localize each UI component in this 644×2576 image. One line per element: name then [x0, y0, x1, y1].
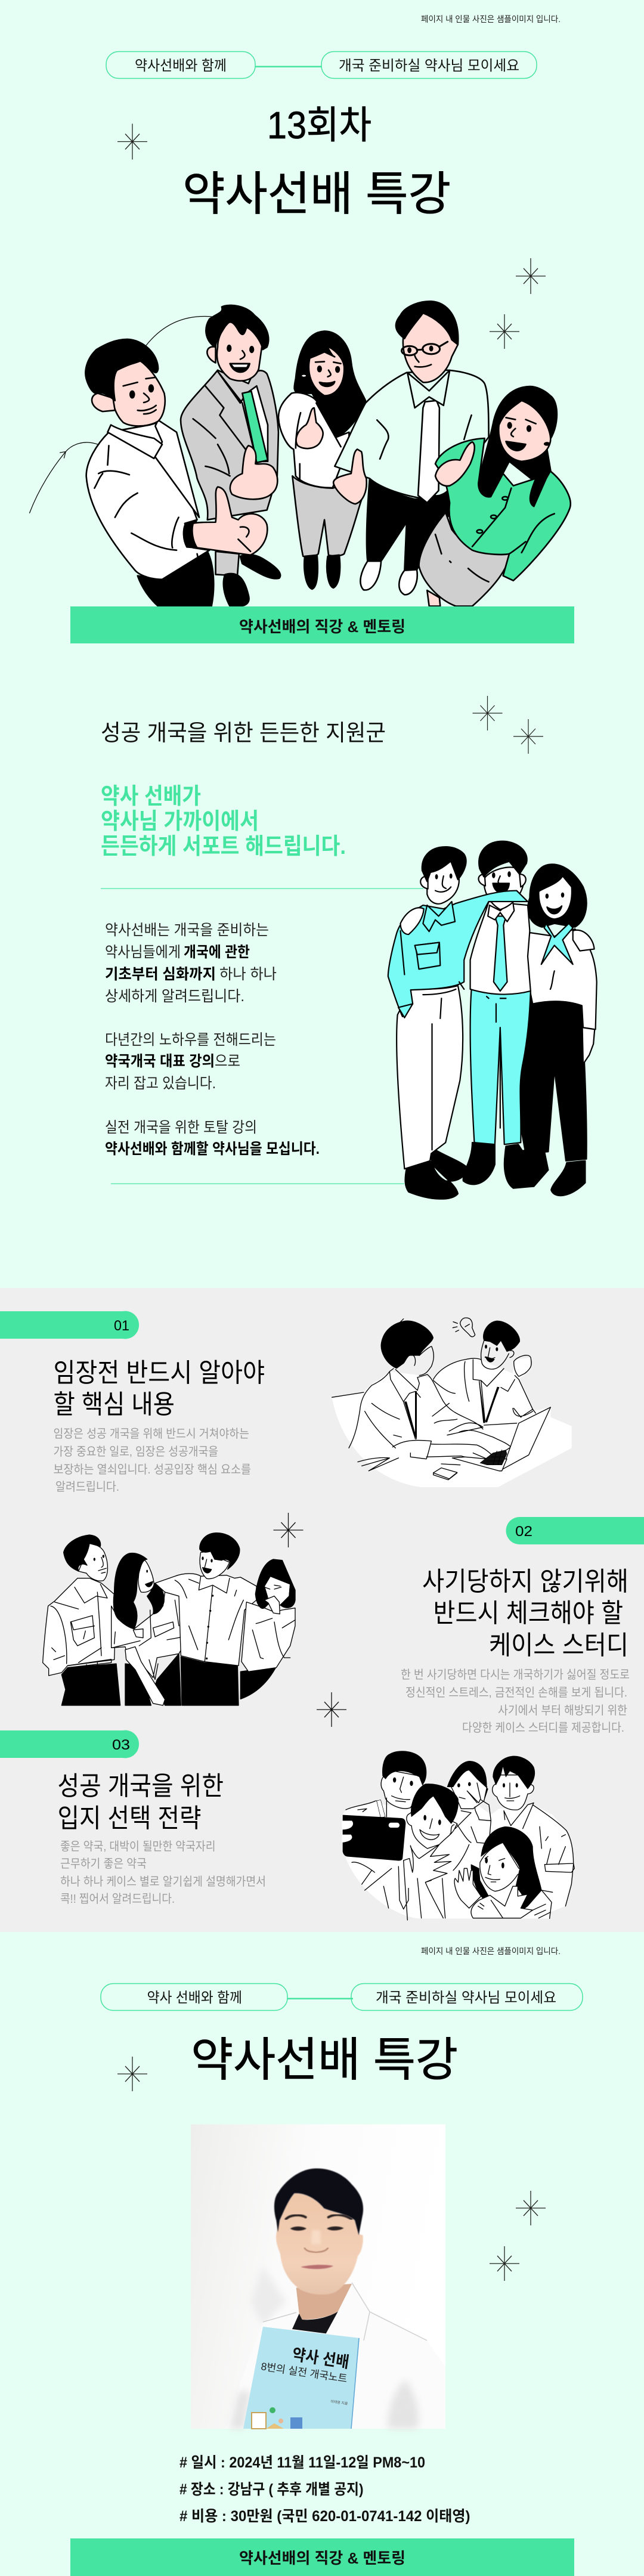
person: man in grey suit: [181, 305, 280, 606]
white bodies: [342, 1787, 574, 1918]
number tab 03: [0, 1730, 139, 1758]
phone: [342, 1815, 405, 1860]
book subtitle: 8번의 실전 개국노트: [260, 2360, 348, 2385]
woman covering mouth: [240, 1559, 295, 1699]
description text: 개국에 관한: [184, 944, 250, 961]
description text: 약사님들에게: [105, 944, 181, 961]
laptop: [500, 1407, 550, 1471]
item 01 heading: [54, 1358, 265, 1419]
banner: direct lecture and mentoring: 약사선배의 직강 & 멘토링: [239, 618, 405, 636]
man at the back right: [493, 1756, 574, 1906]
green headline: 약사 선배가: [101, 784, 201, 809]
light bulb: [453, 1318, 475, 1337]
title: session number: 13회차: [267, 104, 371, 147]
item 02 body: [401, 1668, 630, 1735]
number tab 03: 03: [112, 1737, 130, 1753]
hair right man: [483, 1321, 520, 1352]
description text: 약국개국 대표 강의: [105, 1053, 215, 1070]
banner: direct lecture and mentoring: [70, 2538, 574, 2576]
illustration: two men at a laptop: [332, 1318, 572, 1487]
header pills: [106, 51, 537, 79]
number tab 02: 02: [515, 1524, 532, 1540]
description text: 상세하게 알려드립니다.: [105, 988, 244, 1005]
face: [276, 2193, 363, 2295]
person: woman in green blouse: [419, 386, 571, 606]
description text: 실전 개국을 위한 토탈 강의: [105, 1119, 257, 1136]
pill: gather pharmacists: [321, 51, 537, 79]
white blob: [332, 1358, 572, 1487]
panel background: [0, 1288, 644, 1932]
pill: with the senior: 약사 선배와 함께: [147, 1990, 242, 2006]
person: woman: [504, 864, 597, 1196]
event details: # 일시 : 2024년 11월 11일-12일 PM8~10: [179, 2454, 425, 2471]
item 01 body: 임장은 성공 개국을 위해 반드시 거쳐야하는: [54, 1427, 249, 1441]
illustration: group selfie: [342, 1751, 574, 1920]
illustration: group of four friends: [43, 1533, 295, 1705]
man laughing: [155, 1533, 256, 1705]
icon: sparkle: [317, 1692, 346, 1727]
divider: [101, 888, 423, 889]
coat shading: [230, 2379, 419, 2429]
icon: sparkle: [117, 2057, 147, 2091]
green headline: 약사님 가까이에서: [101, 809, 259, 834]
item 01 body: 보장하는 열쇠입니다. 성공입장 핵심 요소를: [54, 1463, 251, 1476]
illustration: five colleagues giving thumbs up: [30, 301, 571, 606]
neck: [296, 2284, 352, 2320]
eyes: [290, 2227, 344, 2231]
woman in front: [454, 1826, 552, 1918]
item 03 body: 좋은 약국, 대박이 될만한 약국자리: [60, 1840, 216, 1853]
book art: [252, 2407, 302, 2429]
man in pocket shirt: [43, 1535, 120, 1705]
book title: 약사 선배: [291, 2345, 350, 2371]
woman with long hair: [112, 1553, 189, 1705]
description text: 하나 하나: [219, 966, 277, 983]
coat lapel lines: [263, 2283, 427, 2340]
item 02 heading: [422, 1567, 628, 1660]
item 02 body: 다양한 케이스 스터디를 제공합니다.: [462, 1721, 624, 1735]
divider: [111, 1183, 404, 1184]
head and torso details: [274, 2169, 363, 2333]
book author: 이태영 지음: [330, 2399, 348, 2406]
book: [243, 2327, 360, 2429]
pill: with the senior: [106, 51, 255, 79]
number tab 01: 01: [114, 1318, 129, 1334]
description text: 약사선배와 함께할 약사님을 모십니다.: [105, 1141, 320, 1157]
item 03 body: 콕!! 찝어서 알려드립니다.: [60, 1892, 175, 1906]
green headline: [101, 784, 346, 859]
icon: sparkle: [490, 2246, 519, 2281]
description text: [105, 922, 320, 1157]
woman at the back: [447, 1761, 491, 1844]
section: curriculum panel: [0, 1288, 644, 1932]
description text: 다년간의 노하우를 전해드리는: [105, 1032, 276, 1048]
item 01 heading: 할 핵심 내용: [54, 1390, 175, 1419]
illustration: three friends in cyan: [388, 841, 597, 1199]
book spine edge: [351, 2338, 359, 2429]
item 02 body: 사기에서 부터 해방되기 위한: [498, 1704, 627, 1717]
banner: direct lecture and mentoring: [70, 606, 574, 643]
item 01 heading: 임장전 반드시 알아야: [54, 1358, 265, 1388]
sample image notice: 페이지 내 인물 사진은 샘플이미지 입니다.: [421, 14, 561, 24]
person: woman in the middle: [278, 331, 366, 589]
wall shadow: [250, 2266, 286, 2326]
item 02 body: 한 번 사기당하면 다시는 개국하기가 싫어질 정도로: [401, 1668, 630, 1682]
item 01 body: 알려드립니다.: [55, 1480, 119, 1494]
item 01 body: [54, 1427, 251, 1494]
title: lecture name: 약사선배 특강: [182, 168, 451, 220]
white coat: [226, 2283, 445, 2429]
icon: sparkle: [472, 696, 502, 730]
person: man with glasses: [333, 301, 489, 595]
line art bodies: [332, 1358, 535, 1471]
item 02 heading: 사기당하지 않기위해: [422, 1567, 628, 1596]
item 03 body: 근무하기 좋은 약국: [60, 1857, 147, 1871]
black inner shirt: [292, 2312, 338, 2333]
man at back left: [346, 1751, 426, 1818]
nose highlight: [311, 2230, 321, 2244]
description text: 으로: [215, 1053, 240, 1070]
photo: lecturer holding book: [191, 2124, 445, 2429]
event details: # 장소 : 강남구 ( 추후 개별 공지): [179, 2481, 364, 2498]
item 03 body: 하나 하나 케이스 별로 알기쉽게 설명해가면서: [60, 1875, 266, 1888]
second header pills: [101, 1983, 583, 2011]
title: lecture name: 약사선배 특강: [191, 2033, 458, 2086]
pill: with the senior: 약사선배와 함께: [135, 58, 227, 74]
person: man on the left: [388, 847, 528, 1199]
banner: direct lecture and mentoring: 약사선배의 직강 & 멘토링: [239, 2549, 405, 2567]
description text: 약사선배는 개국을 준비하는: [105, 922, 269, 939]
item 02 body: 정신적인 스트레스, 금전적인 손해를 보게 됩니다.: [405, 1686, 627, 1699]
person: man in middle: [463, 841, 531, 1187]
number tab 02: [506, 1517, 644, 1544]
green headline: 든든하게 서포트 해드립니다.: [101, 834, 346, 859]
connector line: [287, 1998, 353, 1999]
hair: [274, 2169, 363, 2235]
pill: gather pharmacists: [351, 1983, 583, 2011]
hair left man: [381, 1321, 434, 1368]
pill: gather pharmacists: 개국 준비하실 약사님 모이세요: [339, 58, 519, 74]
arrow curves: [30, 317, 212, 513]
item 02 heading: 반드시 체크해야 할: [433, 1599, 623, 1628]
event details: # 비용 : 30만원 (국민 620-01-0741-142 이태영): [179, 2508, 470, 2525]
icon: sparkle: [273, 1513, 303, 1547]
eyebrows: [286, 2215, 351, 2219]
icon: sparkle: [516, 258, 546, 294]
man holding phone: [352, 1784, 469, 1920]
heading: support group: 성공 개국을 위한 든든한 지원군: [101, 721, 386, 746]
item 02 heading: 케이스 스터디: [489, 1631, 628, 1660]
pill: gather pharmacists: 개국 준비하실 약사님 모이세요: [376, 1990, 556, 2006]
event details: [179, 2454, 470, 2525]
icon: sparkle: [490, 314, 519, 349]
icon: sparkle: [516, 2191, 546, 2225]
nose: [305, 2248, 328, 2252]
item 03 body: [60, 1840, 266, 1906]
photo backdrop: [191, 2124, 445, 2429]
description text: 기초부터 심화까지: [105, 966, 216, 983]
sample image notice: 페이지 내 인물 사진은 샘플이미지 입니다.: [421, 1946, 561, 1956]
icon: sparkle: [513, 719, 543, 754]
person: man at the front: [85, 339, 267, 606]
icon: sparkle: [117, 124, 147, 160]
item 03 heading: 성공 개국을 위한: [57, 1772, 224, 1801]
item 03 heading: [57, 1772, 224, 1833]
item 01 body: 가장 중요한 일로, 임장은 성공개국을: [54, 1445, 218, 1459]
description text: 자리 잡고 있습니다.: [105, 1075, 216, 1092]
number tab 01: [0, 1311, 139, 1339]
mouth: [301, 2265, 333, 2269]
notebook and pen: [434, 1468, 457, 1479]
connector line: [255, 66, 321, 67]
item 03 heading: 입지 선택 전략: [57, 1804, 202, 1833]
pill: with the senior: [101, 1983, 287, 2011]
